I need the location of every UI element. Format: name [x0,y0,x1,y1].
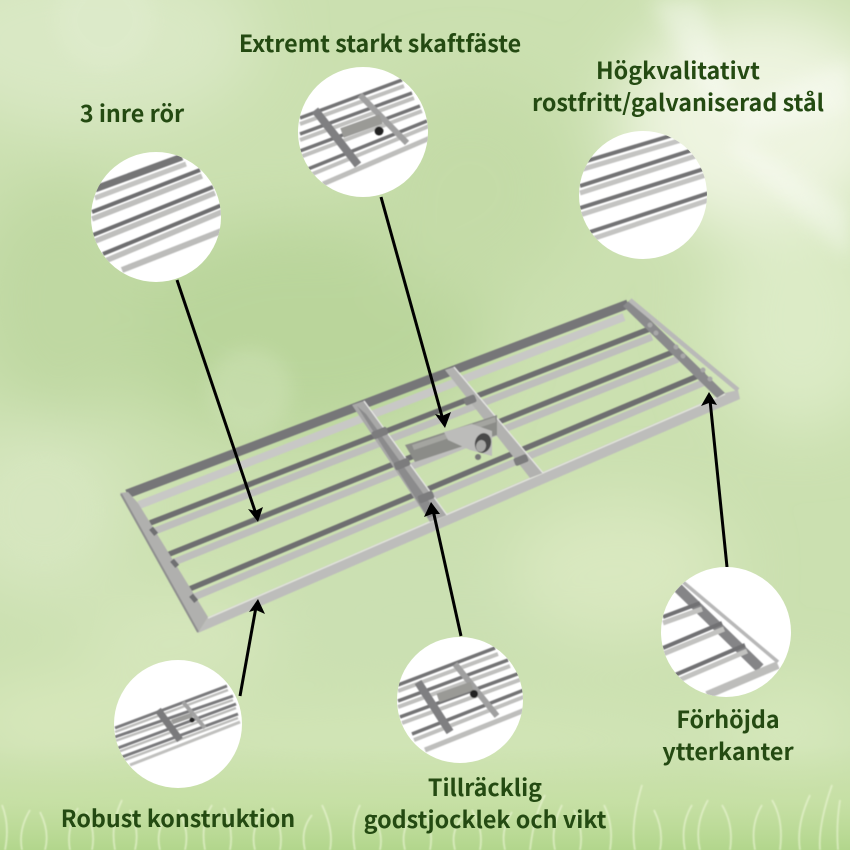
product: steel frame leveling rake [120,300,740,633]
heading: Förhöjda ytterkanter: ytterkanter [662,732,794,766]
shaft mount [405,415,497,462]
heading: Högkvalitativt rostfritt/galvaniserad stål [532,52,824,118]
tube end brackets [149,322,712,603]
inner tubes [150,328,705,598]
circle: raised edges detail [661,567,791,697]
heading: Tillräcklig godstjocklek och vikt [364,769,606,834]
circle: shaft mount detail [298,67,430,197]
heading: Högkvalitativt rostfritt/galvaniserad stål: Högkvalitativt [596,52,760,86]
arrow: skaftfäste [381,197,451,428]
heading: Tillräcklig godstjocklek och vikt: godstjocklek och vikt [364,800,606,834]
heading: Förhöjda ytterkanter: Förhöjda [676,701,780,735]
arrow: godstjocklek [424,502,461,636]
frame bottom rail [198,390,740,633]
heading: Högkvalitativt rostfritt/galvaniserad stål: rostfritt/galvaniserad stål [532,84,824,118]
heading: Robust konstruktion: Robust konstruktion [61,800,295,834]
heading: Tillräcklig godstjocklek och vikt: Tillräcklig [428,769,542,803]
arrow: 3 inre rör [177,280,263,522]
heading: Extremt starkt skaftfäste: Extremt starkt skaftfäste [239,25,521,59]
heading: 3 inre rör: 3 inre rör [80,95,184,129]
heading: Förhöjda ytterkanter [662,701,794,766]
frame right side [623,300,738,398]
circle: wall thickness detail [397,637,526,763]
frame left side [120,492,208,633]
circle: 3 inner tubes detail [91,152,224,282]
circle: sturdy construction detail [114,660,242,788]
frame top rail [127,304,628,505]
circle: stainless steel detail [579,130,715,259]
arrow: robust konstruktion [240,599,265,696]
cross plates [352,367,543,522]
brackets on tubes [371,394,529,504]
arrow: ytterkanter [701,392,727,567]
